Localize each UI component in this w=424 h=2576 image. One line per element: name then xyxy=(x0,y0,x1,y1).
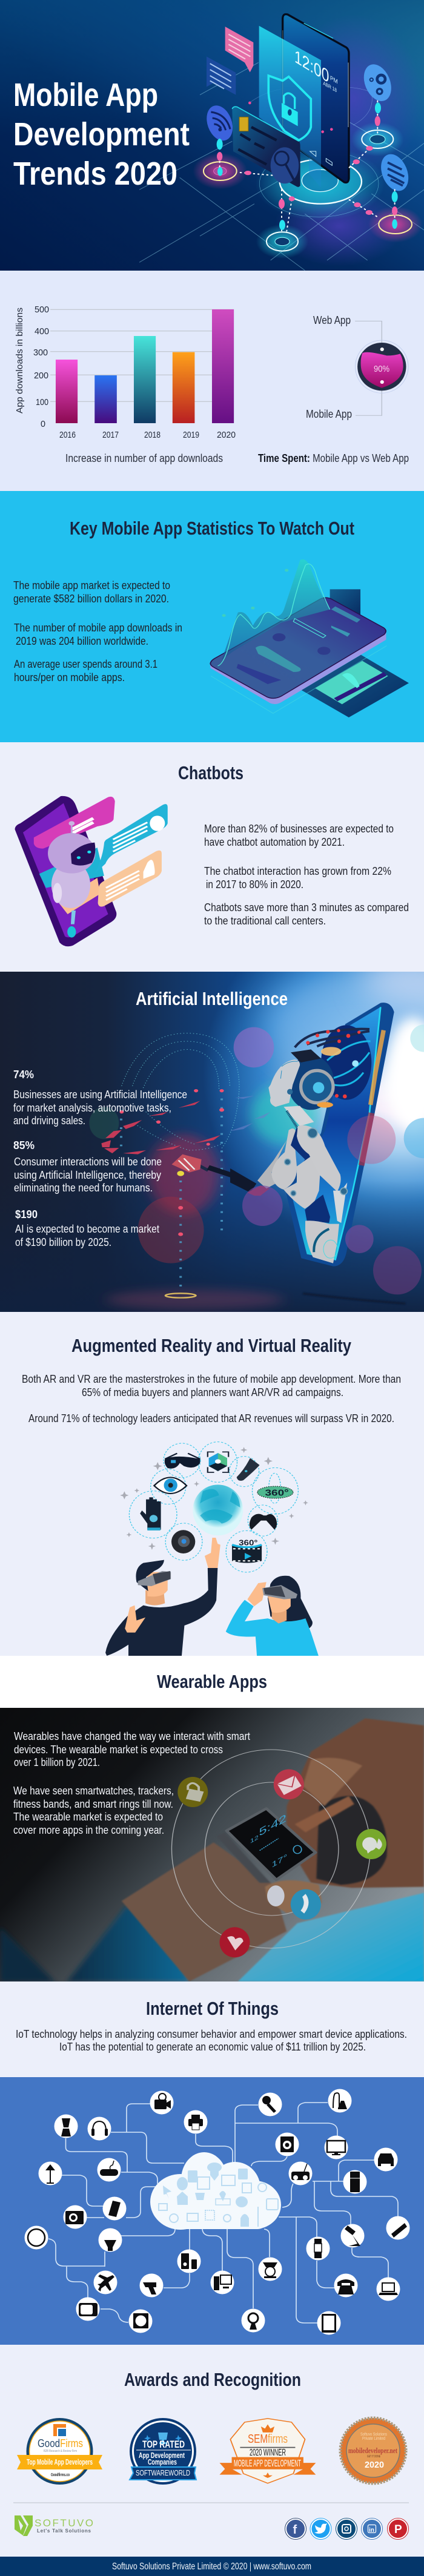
footer: Softuvo Solutions Private Limited © 2020 | www.softuvo.com xyxy=(112,2561,311,2572)
icon: pinterest: P xyxy=(394,2523,402,2536)
node rings xyxy=(193,101,423,259)
icon: payment card xyxy=(315,661,388,704)
icon: tablet xyxy=(322,2314,336,2333)
bubble: pink xyxy=(34,797,115,849)
icon: eye scan xyxy=(154,1477,187,1494)
bubble: teal xyxy=(94,804,168,874)
icon: AR cube xyxy=(208,1452,228,1472)
phone frame xyxy=(286,1003,394,1267)
illustration: isometric phone with charts xyxy=(210,559,409,717)
icon: lock xyxy=(177,1777,208,1807)
bar chart: app downloads xyxy=(15,305,236,464)
icon: VR controller xyxy=(237,1458,260,1481)
phone screen text: ABR 18 xyxy=(323,81,337,93)
icon: wifi bubble xyxy=(207,105,233,140)
text block: AR VR intro xyxy=(22,1373,401,1425)
panel: app downloads and time spent xyxy=(0,271,424,491)
badge: SoftwareWorld top rated: App Development xyxy=(139,2451,185,2460)
bar 2020 xyxy=(212,309,234,423)
gauge: mobile vs web app: Time Spent: Mobile App vs Web App xyxy=(258,452,409,464)
icon: linkedin: in xyxy=(369,2527,374,2534)
bar chart: app downloads: 100 xyxy=(36,397,48,407)
text block: statistics: An average user spends around 3.1 xyxy=(14,658,157,670)
icon: candy xyxy=(391,2223,407,2238)
text block: AI statistics: AI is expected to become a market xyxy=(15,1223,159,1235)
icon: twitter xyxy=(310,2518,331,2539)
bar 2018 xyxy=(134,336,156,423)
icon: chat xyxy=(356,1829,386,1859)
text block: AI statistics: for market analysis, automotive tasks, xyxy=(13,1102,171,1114)
text block: AI statistics: and driving sales. xyxy=(13,1115,85,1127)
icon: globe xyxy=(193,1484,243,1535)
icon: facebook: f xyxy=(293,2523,297,2537)
text block: wearables xyxy=(13,1730,250,1836)
badge: SEMFirms: MOBILE APP DEVELOPMENT xyxy=(234,2459,301,2469)
badge: SEMFirms: 2020 WINNER xyxy=(250,2448,286,2458)
icon: instagram xyxy=(336,2518,357,2539)
icon: webcam xyxy=(171,1530,195,1553)
footer xyxy=(0,2557,424,2576)
person: man with VR headset xyxy=(105,1538,220,1656)
icon: airplane xyxy=(98,2275,114,2291)
text block: statistics: generate $582 billion dollars in 2020. xyxy=(13,593,169,605)
text block: AI statistics: using Artificial Intelligence, thereby xyxy=(14,1169,161,1181)
icon: 360 video xyxy=(232,1539,262,1563)
badge: GoodFirms: Goodfirms.co xyxy=(51,2473,70,2477)
icon: blue glass panel xyxy=(259,26,321,188)
illustration: hand with smartwatch xyxy=(0,1718,424,1981)
badge: SoftwareWorld top rated: TOP RATED xyxy=(142,2439,185,2450)
badge: mobiledeveloper: mobiledeveloper.net xyxy=(348,2446,397,2455)
panel: artificial intelligence xyxy=(0,972,424,1312)
icon: laptop xyxy=(379,2283,398,2295)
robot xyxy=(48,821,96,938)
badge: SoftwareWorld top rated: Companies xyxy=(148,2457,177,2466)
text block: AR VR intro: 65% of media buyers and planners want AR/VR ad campaigns. xyxy=(82,1386,343,1398)
icon: blue chat bubble xyxy=(207,56,236,95)
icon: credit card xyxy=(232,107,300,187)
panel: wearable apps heading band xyxy=(0,1656,424,1708)
title: Trends 2020 xyxy=(13,156,177,192)
icon: monitor xyxy=(327,2141,345,2155)
icon: floor lamp xyxy=(45,2164,55,2184)
badge: GoodFirms xyxy=(17,2418,102,2485)
icon: boombox xyxy=(291,2164,310,2180)
icon: drill xyxy=(143,2282,156,2294)
bar chart: app downloads: App downloads in billions xyxy=(15,308,25,413)
text block: AI statistics: Consumer interactions will be done xyxy=(14,1156,162,1168)
gauge: mobile vs web app: 90% xyxy=(374,364,389,374)
text block: chatbot facts: More than 82% of businesses are expected to xyxy=(204,823,394,835)
bar 2019 xyxy=(173,352,194,423)
badge: SEMFirms xyxy=(219,2419,316,2483)
icon: shield with padlock xyxy=(268,76,311,140)
text block: AI statistics: 85% xyxy=(13,1139,35,1151)
text block: chatbot facts xyxy=(204,823,409,927)
panel: key statistics xyxy=(0,491,424,742)
illustration: robot emerging from phone xyxy=(230,1003,424,1294)
title xyxy=(13,77,190,192)
panel: IoT network diagram xyxy=(0,2077,424,2345)
icon: camera xyxy=(65,2211,84,2224)
smartwatch: 5:42 xyxy=(259,1812,287,1839)
badge: GoodFirms: GoodFirms xyxy=(38,2437,83,2449)
icon: retro tv xyxy=(79,2303,98,2316)
robot body xyxy=(230,1106,347,1263)
icon: gamepad xyxy=(250,1514,277,1530)
icon: 360 degree orbit xyxy=(257,1486,293,1498)
heading: Augmented Reality and Virtual Reality xyxy=(71,1335,352,1356)
panel: chatbots xyxy=(0,742,424,972)
icon: linkedin xyxy=(361,2518,383,2539)
badge: mobiledeveloper: Private Limited xyxy=(362,2437,385,2441)
icon: list bubble xyxy=(381,154,408,191)
bar 2017 xyxy=(94,375,117,423)
bar chart: app downloads: 2017 xyxy=(102,430,119,440)
text block: wearables: devices. The wearable market is expected to cross xyxy=(14,1744,223,1756)
icon: heart xyxy=(219,1927,250,1957)
gauge: mobile vs web app xyxy=(258,314,409,464)
badge: SEMFirms: SEMfirms xyxy=(248,2433,288,2446)
icon: clock xyxy=(28,2229,45,2246)
panel: awards and footer area xyxy=(0,2345,424,2557)
heading: Wearable Apps xyxy=(157,1671,267,1692)
text block: statistics: The mobile app market is expected to xyxy=(13,579,170,591)
icon: car xyxy=(378,2153,394,2166)
bar chart: app downloads: 2016 xyxy=(59,430,76,440)
text block: wearables: We have seen smartwatches, trackers, xyxy=(13,1785,174,1797)
bar chart: app downloads: 2019 xyxy=(183,430,199,440)
robot hand xyxy=(171,1155,233,1176)
icon: vacuum xyxy=(333,2093,347,2109)
icon: camcorder xyxy=(154,2093,171,2109)
text block: IoT xyxy=(16,2028,407,2053)
title: Development xyxy=(13,116,190,153)
translucent bubbles xyxy=(234,1024,424,1294)
icon: gamepad xyxy=(100,2161,118,2176)
person: woman with VR headset xyxy=(226,1576,319,1656)
text block: chatbot facts: in 2017 to 80% in 2020. xyxy=(206,878,303,891)
text block: statistics xyxy=(13,579,182,684)
text block: chatbot facts: to the traditional call centers. xyxy=(204,915,326,927)
text block: wearables: Wearables have changed the way we interact with smart xyxy=(14,1730,250,1742)
bar chart: app downloads: 2020 xyxy=(217,430,236,440)
cloud with app icons xyxy=(150,2152,281,2230)
text block: AI statistics: 74% xyxy=(13,1069,34,1081)
heading: Internet Of Things xyxy=(146,1998,279,2019)
bar chart: app downloads: Increase in number of app downloads xyxy=(65,452,223,464)
device nodes xyxy=(24,2089,409,2334)
icon: mobile phone xyxy=(108,2201,121,2217)
icon: 360 video: 360° xyxy=(239,1539,257,1547)
text block: wearables: fitness bands, and smart rings till now. xyxy=(13,1798,173,1810)
icon: pinterest xyxy=(388,2518,408,2539)
smartwatch xyxy=(216,1808,316,1883)
bar chart: app downloads: 300 xyxy=(33,348,48,358)
heading: Key Mobile App Statistics To Watch Out xyxy=(70,518,354,539)
social icons xyxy=(285,2518,408,2539)
phone screen text: 12:00 xyxy=(294,45,329,87)
badge: mobiledeveloper: GET IT DONE xyxy=(367,2455,380,2459)
panel: internet of things heading xyxy=(0,1981,424,2077)
illustration: robot in phone xyxy=(15,796,168,946)
badge: SoftwareWorld top rated: SOFTWAREWORLD xyxy=(136,2468,190,2477)
icon: blender xyxy=(61,2118,71,2136)
bar 2016 xyxy=(56,360,78,423)
badge: mobiledeveloper: Softuvo Solutions xyxy=(360,2433,387,2437)
bar chart: app downloads: 200 xyxy=(34,371,48,381)
bubble: peach xyxy=(98,851,162,907)
bar chart: app downloads: 2018 xyxy=(144,430,161,440)
icon: microphone xyxy=(262,2096,276,2113)
logo: Softuvo xyxy=(15,2515,93,2536)
text block: AI statistics: of $190 billion by 2025. xyxy=(15,1236,111,1248)
bar chart: app downloads: 0 xyxy=(41,419,45,429)
text block: statistics: The number of mobile app downloads in xyxy=(14,622,182,634)
icon: fridge xyxy=(350,2172,360,2192)
heading: Awards and Recognition xyxy=(124,2369,301,2390)
connector lines xyxy=(48,2103,398,2323)
text block: wearables: cover more apps in the coming year. xyxy=(13,1824,164,1836)
text block: statistics: hours/per on mobile apps. xyxy=(14,671,125,684)
icon: phone call xyxy=(291,1889,321,1920)
icon: sensor glove xyxy=(140,1497,161,1530)
title: Mobile App xyxy=(13,77,158,113)
particle globe xyxy=(122,1033,239,1150)
badge: GoodFirms: Top Mobile App Developers xyxy=(27,2457,93,2466)
phone screen text: PM xyxy=(330,74,338,85)
text block: AI statistics: eliminating the need for humans. xyxy=(14,1182,153,1194)
icon: wristwatch xyxy=(314,2239,322,2258)
icon: washer xyxy=(280,2136,294,2152)
phone xyxy=(283,14,349,182)
icon: webcam xyxy=(248,2313,258,2330)
badge: mobiledeveloper: 2020 xyxy=(365,2460,384,2470)
icon: desktop pc xyxy=(214,2275,231,2290)
icon: 360 degree orbit: 360° xyxy=(265,1487,289,1498)
hero illustration: security phone network xyxy=(139,14,424,271)
logo: Softuvo: SOFTUVO xyxy=(35,2517,93,2529)
icon: scale xyxy=(263,2262,277,2278)
badge: mobiledeveloper xyxy=(340,2418,406,2483)
heading: Chatbots xyxy=(178,762,243,783)
illustration: AR VR icons and people xyxy=(105,1442,319,1656)
illustration: particles and robot arm xyxy=(89,1033,406,1309)
text block: statistics: 2019 was 204 billion worldwide. xyxy=(16,635,148,647)
badge: GoodFirms: B2B Research & Review Firm xyxy=(44,2449,77,2453)
icon: printer xyxy=(188,2115,203,2130)
text block: chatbot facts: have chatbot automation by 2021. xyxy=(204,836,345,848)
text block: AI statistics xyxy=(13,1069,187,1248)
icon: pink chat bubble xyxy=(225,27,253,72)
icon: telephone xyxy=(337,2279,354,2294)
text block: wearables: The wearable market is expected to xyxy=(13,1811,163,1823)
icon: speakers xyxy=(181,2253,197,2269)
heading: Artificial Intelligence xyxy=(136,988,288,1009)
panel: augmented and virtual reality xyxy=(0,1312,424,1656)
icon: facebook xyxy=(285,2518,306,2539)
gauge: mobile vs web app: Mobile App xyxy=(306,408,352,420)
panel: hero xyxy=(0,0,424,271)
icon: desk lamp xyxy=(345,2225,360,2246)
icon: light bulb xyxy=(104,2240,116,2251)
gauge: mobile vs web app: Web App xyxy=(313,314,351,326)
text block: wearables: over 1 billion by 2021. xyxy=(14,1756,100,1768)
icon: gears bubble xyxy=(363,64,391,101)
phone screen text xyxy=(248,45,348,165)
text block: IoT: IoT has the potential to generate an economic value of $11 trillion by 2025. xyxy=(59,2041,366,2053)
smartwatch: 12 xyxy=(250,1834,259,1845)
smartwatch: 17° xyxy=(272,1853,287,1869)
icon: headset xyxy=(91,2121,108,2136)
bar chart: app downloads: 500 xyxy=(35,305,49,315)
badge: SoftwareWorld top rated xyxy=(130,2418,196,2485)
logo: Softuvo: Let's Talk Solutions xyxy=(37,2528,91,2534)
bar chart: app downloads: 400 xyxy=(35,326,49,337)
text block: chatbot facts: The chatbot interaction has grown from 22% xyxy=(204,865,391,877)
robot head and mechanics xyxy=(268,1025,371,1110)
icon: smart glasses xyxy=(165,1454,200,1469)
text block: AI statistics: $190 xyxy=(15,1208,38,1220)
text block: AI statistics: Businesses are using Artificial Intelligence xyxy=(13,1089,187,1101)
icon: mail xyxy=(274,1769,304,1799)
icon: fan xyxy=(133,2313,148,2328)
panel: wearable apps photo xyxy=(0,1708,424,1981)
